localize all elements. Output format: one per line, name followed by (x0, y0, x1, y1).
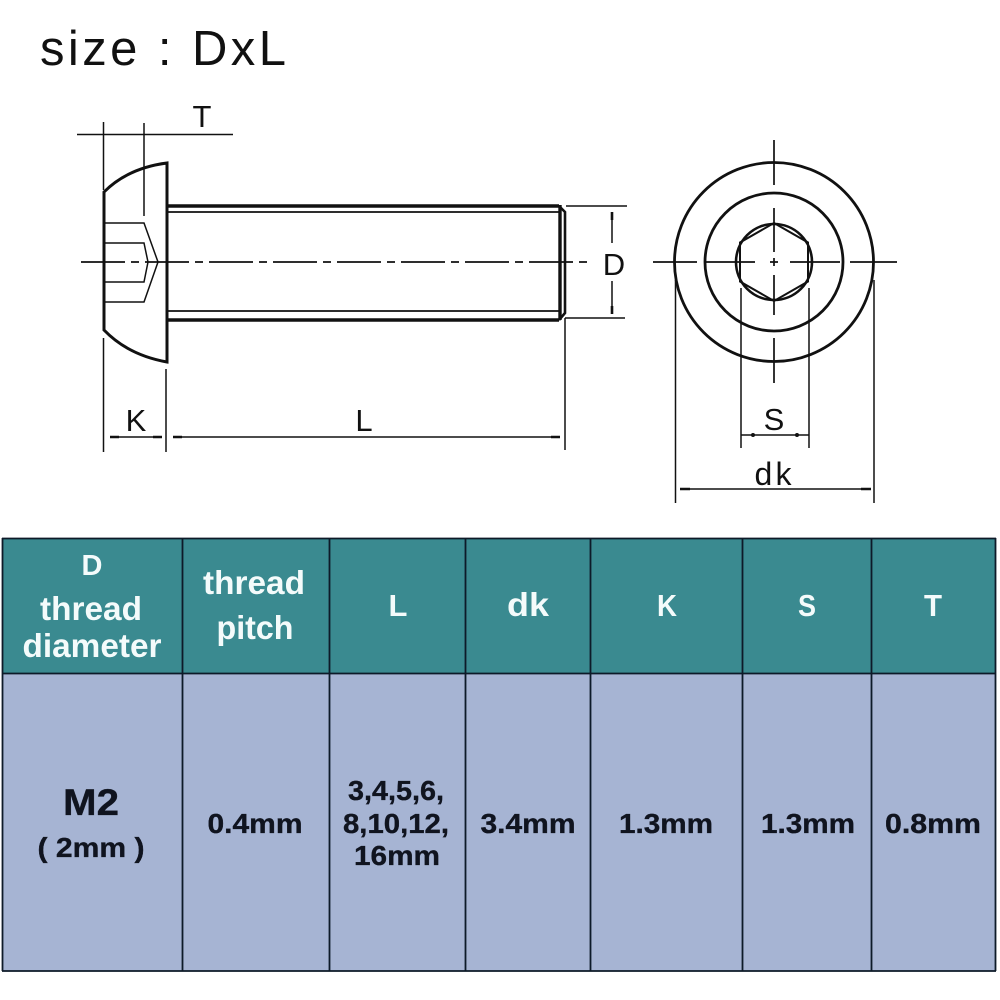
dimension dk (676, 280, 874, 503)
value: dk: 3.4mm (480, 808, 576, 839)
dimension L: L (355, 403, 373, 438)
header: D thread diameter: diameter (22, 627, 162, 664)
bolt head (104, 163, 167, 362)
crosshair center lines (653, 140, 897, 383)
table grid lines (2, 538, 996, 971)
dimension K (104, 338, 166, 452)
side view drawing of the bolt (81, 163, 588, 362)
end view drawing of the bolt (653, 140, 897, 383)
dimension K: K (126, 403, 147, 438)
header: T: T (924, 588, 942, 623)
dimension D: D (603, 247, 625, 282)
header: thread pitch (203, 564, 305, 646)
header: thread pitch: pitch (216, 609, 294, 646)
header: D thread diameter: D (82, 550, 102, 582)
header: D thread diameter (22, 550, 162, 664)
header: dk: dk (507, 586, 550, 623)
dimension T: T (193, 99, 212, 134)
dimension D (565, 206, 627, 318)
dimension S: S (764, 402, 784, 437)
title: size : DxL (40, 22, 286, 76)
hexagon socket (740, 223, 808, 301)
header: D thread diameter: thread (40, 590, 142, 627)
value: L lengths (343, 775, 449, 871)
hex socket hidden lines (105, 223, 158, 302)
value: T: 0.8mm (885, 808, 981, 839)
header: K: K (657, 588, 678, 623)
header: S: S (798, 588, 816, 623)
dimension dk: dk (754, 456, 792, 492)
dimension S (741, 288, 809, 448)
value: M2 (2mm): ( 2mm ) (38, 832, 144, 863)
center line (81, 261, 588, 263)
value: M2 (2mm): M2 (63, 782, 119, 823)
value: L lengths: 8,10,12, (343, 808, 449, 839)
value: L lengths: 16mm (354, 840, 440, 871)
dimension L (173, 318, 565, 450)
table data row (2, 673, 996, 971)
value: L lengths: 3,4,5,6, (348, 775, 444, 806)
header: L: L (389, 588, 407, 623)
value: thread pitch: 0.4mm (208, 808, 302, 839)
specification table (2, 538, 996, 971)
dimension T (77, 99, 233, 216)
threaded shank (168, 212, 560, 311)
table header row (2, 538, 996, 673)
value: K: 1.3mm (619, 808, 713, 839)
value: S: 1.3mm (761, 808, 855, 839)
value: M2 (2mm) (38, 782, 144, 863)
header: thread pitch: thread (203, 564, 305, 601)
